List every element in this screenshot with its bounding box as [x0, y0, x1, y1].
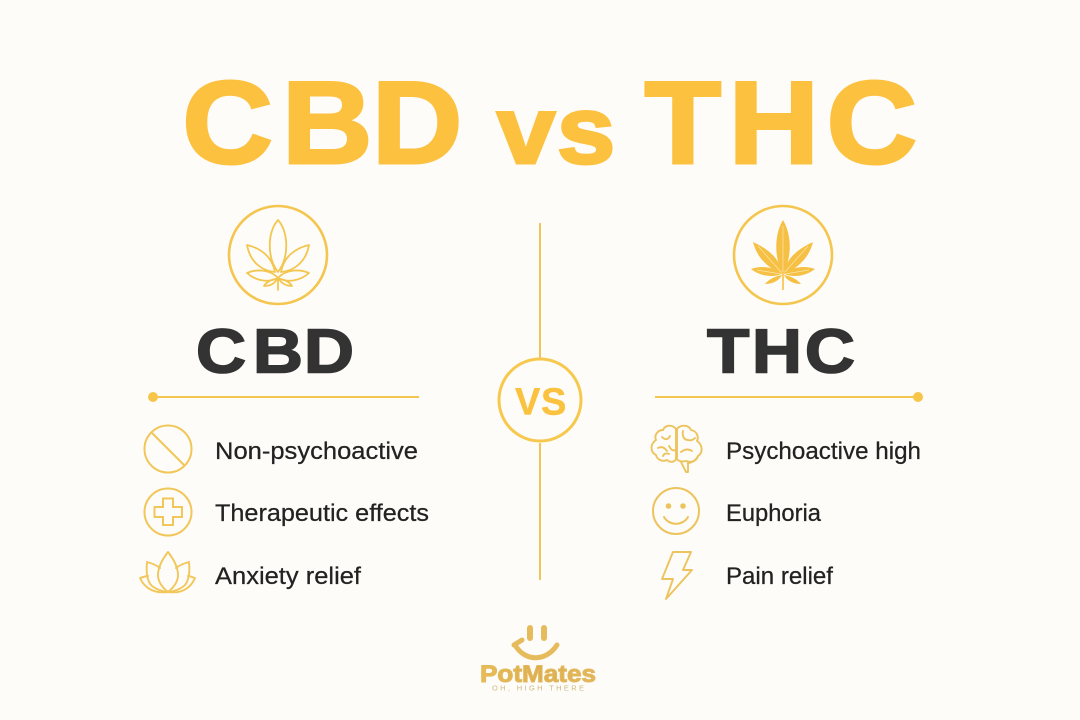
divider with dot	[655, 392, 923, 402]
label: Psychoactive high: Psychoactive high	[726, 438, 921, 465]
label: Euphoria: Euphoria	[726, 500, 822, 527]
icon: lotus	[140, 552, 195, 592]
label: Pain relief: Pain relief	[726, 563, 833, 590]
title: CBD	[182, 57, 462, 188]
icon: prohibited sign	[144, 426, 192, 472]
panel: THC	[652, 206, 923, 599]
heading: THC: THC	[707, 316, 855, 386]
icon: filled cannabis leaf	[734, 206, 832, 304]
title: vs	[497, 77, 615, 184]
icon: lightning bolt	[662, 552, 692, 599]
title	[182, 57, 917, 188]
logo tagline: OH, HIGH THERE	[492, 684, 584, 692]
center VS divider	[499, 223, 581, 580]
label: Anxiety relief: Anxiety relief	[215, 563, 361, 590]
center VS divider: VS	[515, 382, 566, 424]
icon: brain	[652, 426, 702, 472]
panel: CBD	[140, 206, 429, 592]
label: Non-psychoactive: Non-psychoactive	[215, 438, 418, 465]
icon: medical cross	[144, 488, 192, 536]
icon: outlined cannabis leaf	[229, 206, 327, 304]
divider with dot	[148, 392, 419, 402]
logo: PotMates	[480, 628, 596, 692]
label: Therapeutic effects: Therapeutic effects	[215, 500, 429, 527]
title: THC	[645, 57, 917, 188]
logo wordmark: PotMates	[480, 661, 596, 688]
heading: CBD: CBD	[196, 316, 354, 386]
logo smile mark	[514, 628, 557, 658]
icon: smiley	[653, 488, 699, 534]
